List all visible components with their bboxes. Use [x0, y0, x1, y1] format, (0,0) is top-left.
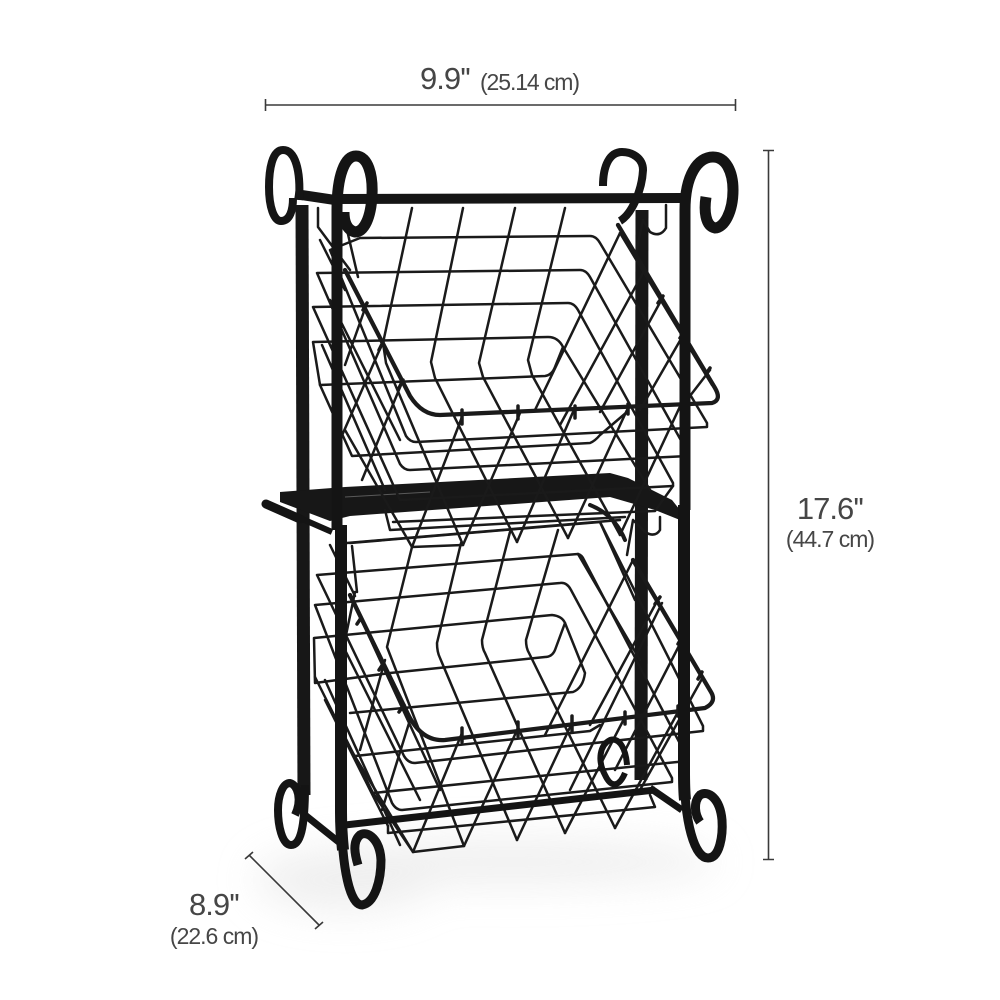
handle [266, 504, 332, 532]
lower basket hooks [330, 517, 660, 596]
scroll: back left bottom [278, 783, 305, 845]
upper basket bottom rows [385, 486, 673, 530]
upper basket clips [363, 296, 710, 424]
upper basket grid wires [383, 208, 463, 545]
floor shadow [255, 840, 720, 910]
lower basket right wall wires [545, 560, 703, 790]
depth label: 8.9'' [189, 887, 239, 922]
lower basket grid wires [387, 547, 464, 846]
upper basket rows [330, 236, 707, 442]
scroll: back right bottom [600, 740, 627, 784]
lower front posts [341, 505, 722, 905]
dimension: height [763, 150, 874, 860]
lower basket rows [315, 522, 703, 793]
dimension: height: (44.7 cm) [786, 526, 874, 552]
middle shelf [280, 473, 680, 521]
upper basket [313, 205, 718, 547]
scroll: front left bottom [341, 525, 343, 850]
upper basket rim [345, 225, 718, 415]
dimension: depth [170, 852, 323, 949]
dimension: width: (25.14 cm) [480, 69, 579, 95]
upper basket hooks [318, 205, 666, 277]
height line [763, 150, 774, 860]
top rail [295, 194, 682, 200]
width line [265, 99, 736, 111]
depth line [245, 852, 323, 929]
dimension: depth: (22.6 cm) [170, 923, 258, 949]
shelf highlight [345, 492, 430, 497]
upper basket front wires [412, 400, 683, 547]
height label: 17.6'' [797, 491, 863, 526]
scroll: back left [269, 150, 299, 221]
scroll: back right [603, 152, 643, 221]
lower basket left wall wires [325, 592, 440, 845]
base bars [305, 788, 682, 843]
lower basket [314, 505, 713, 852]
upper basket right wall wires [535, 233, 710, 425]
scroll: front left top [337, 156, 372, 530]
back posts [302, 205, 642, 795]
lower basket rim [350, 560, 713, 740]
upper basket left wall wires [320, 240, 403, 490]
dimension: width [265, 61, 736, 111]
lower basket clips [357, 597, 702, 742]
scroll: front right top [685, 157, 733, 510]
product: two-tier wire basket stand [266, 150, 733, 905]
lower basket front wires [413, 712, 678, 852]
width label: 9.9'' [420, 61, 470, 96]
scroll: front right bottom [684, 505, 685, 800]
